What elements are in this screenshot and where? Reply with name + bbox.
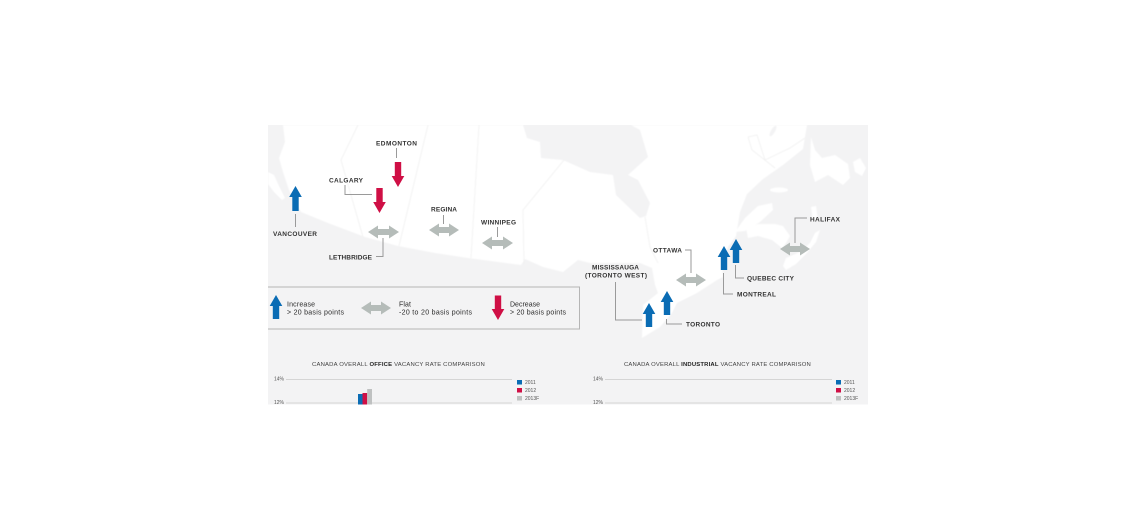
city: Vancouver: VANCOUVER xyxy=(273,231,317,238)
city: Halifax: HALIFAX xyxy=(810,216,841,224)
Cape Breton xyxy=(812,206,818,221)
city: Winnipeg: WINNIPEG xyxy=(481,220,516,226)
city: Halifax xyxy=(780,216,841,256)
chart: office vacancy: 12% xyxy=(274,400,285,406)
legend: increase: Increase xyxy=(287,302,315,308)
Gaspe peninsula xyxy=(735,203,773,232)
province borders xyxy=(756,135,773,166)
city: Calgary: CALGARY xyxy=(329,178,364,184)
city: Quebec City: QUEBEC CITY xyxy=(747,276,795,282)
office chart title: CANADA OVERALL OFFICE VACANCY RATE COMPARISON xyxy=(312,362,485,368)
industrial chart title: CANADA OVERALL INDUSTRIAL VACANCY RATE COMPARISON xyxy=(624,362,811,368)
city: Edmonton xyxy=(376,140,417,187)
city: Calgary xyxy=(329,178,386,213)
city: Lethbridge: LETHBRIDGE xyxy=(329,254,373,262)
Hudson Bay and James Bay xyxy=(523,125,650,218)
legend: decrease: > 20 basis points xyxy=(510,310,566,316)
city: Toronto xyxy=(661,291,720,328)
legend: increase: > 20 basis points xyxy=(287,310,344,316)
legend: flat: -20 to 20 basis points xyxy=(399,310,472,316)
city: Edmonton: EDMONTON xyxy=(376,140,417,148)
chart: industrial vacancy: 14% xyxy=(593,376,604,382)
legend: increase xyxy=(270,295,344,319)
legend: flat: Flat xyxy=(399,302,411,308)
city: Vancouver xyxy=(273,186,317,238)
city: Mississauga xyxy=(585,264,655,327)
chart: industrial vacancy: 2013F xyxy=(844,396,858,402)
chart: industrial vacancy: 12% xyxy=(593,400,604,406)
legend: decrease xyxy=(492,296,566,320)
Canada landmass xyxy=(279,125,807,338)
Vancouver Island xyxy=(268,173,284,200)
map landmass layer xyxy=(268,125,866,338)
city: Mississauga: MISSISSAUGA xyxy=(592,264,639,272)
city: Ottawa: OTTAWA xyxy=(653,248,682,254)
city: Toronto: TORONTO xyxy=(686,322,720,328)
Newfoundland xyxy=(810,141,850,184)
chart: industrial vacancy xyxy=(593,362,858,406)
Avalon peninsula xyxy=(854,159,866,175)
city: Quebec City xyxy=(730,239,795,282)
chart: office vacancy: 2011 xyxy=(525,380,536,386)
legend panel xyxy=(268,287,580,329)
chart: industrial vacancy: 2012 xyxy=(844,388,855,394)
city: Lethbridge xyxy=(329,226,399,262)
legend: decrease: Decrease xyxy=(510,302,540,308)
city: Regina: REGINA xyxy=(431,206,457,214)
New Brunswick xyxy=(746,224,790,248)
chart: office vacancy: 2013F xyxy=(525,396,539,402)
Nova Scotia xyxy=(783,230,820,270)
chart: industrial vacancy: 2011 xyxy=(844,380,855,386)
chart: office vacancy xyxy=(274,362,539,406)
city: Regina xyxy=(429,206,459,236)
lake xyxy=(770,126,776,136)
city: Montreal xyxy=(718,246,776,298)
city: Winnipeg xyxy=(481,220,516,250)
legend: flat xyxy=(361,302,472,316)
chart: office vacancy: 2012 xyxy=(525,388,536,394)
Anticosti Island xyxy=(770,188,788,192)
chart: office vacancy: 14% xyxy=(274,376,285,382)
city: Mississauga: (TORONTO WEST) xyxy=(585,272,647,280)
city: Montreal: MONTREAL xyxy=(737,292,776,298)
panel: map of Canada xyxy=(268,125,868,406)
city: Ottawa xyxy=(653,248,706,286)
